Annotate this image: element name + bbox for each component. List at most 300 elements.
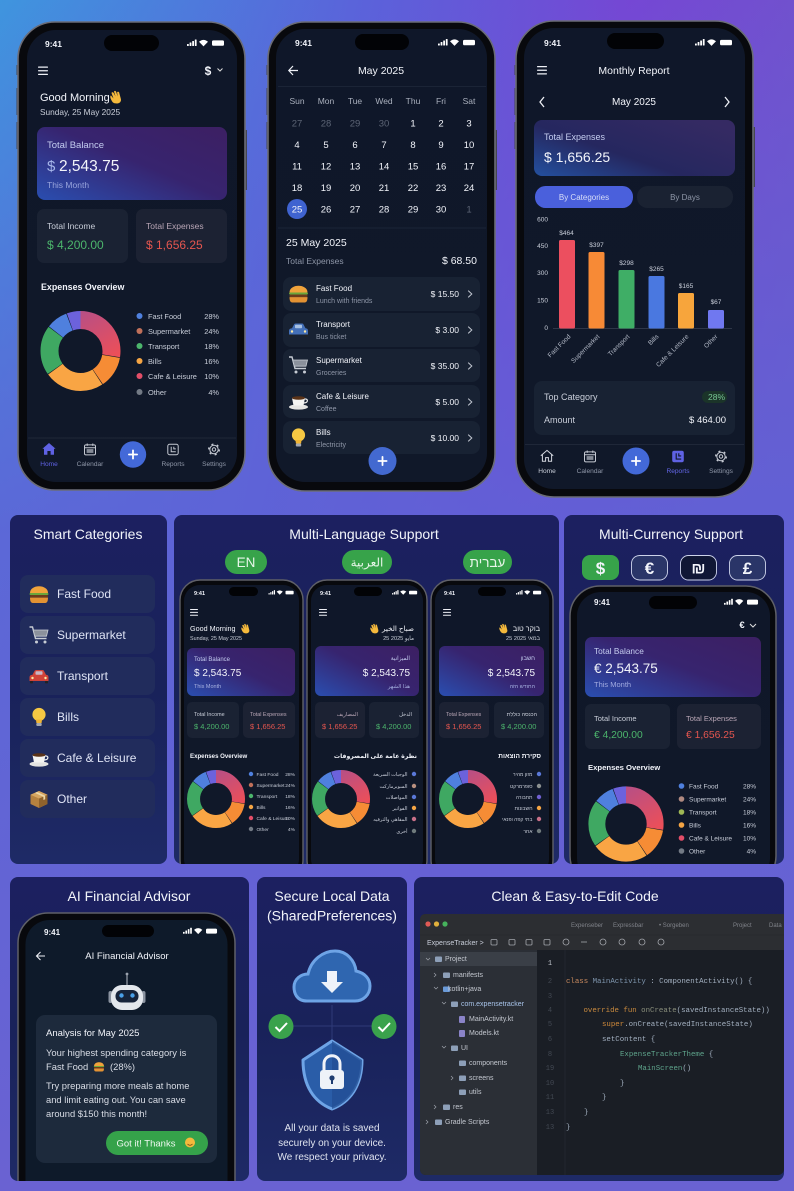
card: top category: Top Category: [544, 392, 598, 402]
expense row: bills: [283, 421, 480, 454]
calendar grid: 21: [379, 183, 389, 194]
currency button: euro: €: [645, 559, 655, 578]
phone: euro currency view: 18%: [743, 810, 756, 816]
source code: }: [602, 1094, 606, 1102]
calendar grid: Sat: [463, 96, 476, 106]
project tree: res: [453, 1104, 463, 1111]
line numbers: 1: [548, 960, 552, 968]
heading: AI Financial Advisor: [68, 888, 191, 904]
privacy note: [277, 1123, 387, 1163]
calendar grid: 7: [381, 140, 387, 151]
phone: euro currency view: 10%: [743, 836, 756, 842]
line numbers: 2: [548, 978, 552, 986]
category labels: Bills: [647, 333, 661, 347]
privacy note: securely on your device.: [278, 1138, 386, 1149]
card: total expenses: $ 1,656.25: [146, 238, 203, 252]
y axis labels: [537, 216, 548, 332]
mini phones: [180, 580, 553, 880]
expense row: cafe and leisure: Coffee: [316, 406, 337, 413]
calendar grid: 8: [410, 140, 416, 151]
phone: english: Fast Food: [256, 772, 279, 778]
chart legend: [136, 312, 219, 397]
phone: arabic: المواصلات: [386, 795, 408, 801]
status bar: 9:41: [295, 38, 312, 48]
expense row: transport: Bus ticket: [316, 334, 346, 341]
phone: arabic: الدخل: [399, 712, 412, 718]
category: other: [20, 780, 155, 818]
chart legend: 18%: [204, 342, 219, 351]
phone: english: Total Expenses: [250, 712, 287, 718]
calendar grid: 3: [466, 118, 472, 130]
category: transport: Transport: [57, 669, 109, 683]
card: total balance: 2,543.75: [59, 158, 119, 175]
day summary: 25 May 2025: [286, 237, 347, 249]
phone: arabic: $ 1,656.25: [322, 722, 357, 731]
window title bar: Expenseber: [571, 923, 603, 929]
expense row: fast food: Fast Food: [316, 284, 352, 293]
greeting: Sunday, 25 May 2025: [40, 107, 120, 117]
icon: check right: [372, 1014, 396, 1039]
phone: english: $ 4,200.00: [194, 722, 229, 731]
calendar grid: 4: [294, 140, 300, 151]
value labels: [559, 230, 722, 306]
chart legend: 16%: [204, 357, 219, 366]
heading: Clean & Easy-to-Edit Code: [491, 888, 659, 904]
toolbar: ExpenseTracker >: [427, 940, 484, 947]
phone: arabic: الميزانية: [391, 656, 410, 662]
project tree: Models.kt: [469, 1030, 499, 1037]
phone frame: [514, 21, 755, 497]
phone: english: Good Morning: [190, 624, 236, 633]
phone: euro currency view: Total Income: [594, 714, 637, 723]
calendar grid: 2: [438, 118, 444, 130]
phone: english: Cafe & Leisure: [256, 816, 289, 822]
phone: hebrew: חשבונות: [515, 806, 532, 812]
category labels: Cafe & Leisure: [655, 333, 691, 369]
phone: euro currency view: 24%: [743, 796, 756, 804]
calendar grid: 27: [292, 118, 302, 130]
heading: Secure Local Data: [274, 888, 390, 904]
heading: Multi-Language Support: [289, 526, 439, 542]
bottom navigation: Reports: [161, 461, 185, 468]
phone: euro currency view: Fast Food: [689, 784, 719, 790]
card: total income: [37, 209, 128, 263]
line numbers: 13: [546, 1124, 554, 1132]
source code: MainScreen(): [638, 1065, 691, 1073]
expense row: bills: Electricity: [316, 442, 346, 449]
source code: }: [566, 1124, 570, 1132]
bottom navigation: Settings: [202, 461, 227, 468]
expense row: transport: $ 3.00: [435, 325, 459, 335]
category labels: Transport: [607, 333, 632, 358]
phone: english: 9:41: [194, 591, 205, 597]
phone: monthly report screen: [514, 21, 755, 497]
heading: (SharedPreferences): [267, 908, 397, 924]
category: transport: [20, 657, 155, 695]
phone: hebrew: בתי קפה ופנאי: [502, 817, 532, 823]
project tree: components: [469, 1060, 508, 1067]
window title bar: Expressbar: [613, 923, 643, 929]
icon: menu: [38, 66, 48, 75]
phone: euro currency view: Cafe & Leisure: [689, 836, 732, 842]
chart legend: 10%: [204, 372, 219, 381]
line numbers: 3: [548, 993, 552, 1001]
source code: override fun onCreate(savedInstanceState)): [584, 1007, 770, 1015]
expense row: fast food: $ 15.50: [431, 289, 459, 299]
currency button: pound: £: [743, 559, 753, 578]
phone: english: 28%: [285, 772, 296, 778]
calendar grid: 19: [321, 183, 331, 194]
currency button: dollar: [582, 555, 619, 580]
calendar grid: [278, 86, 486, 228]
phone: euro currency view: Other: [689, 848, 706, 856]
phone: hebrew: [431, 580, 553, 880]
card: top category: $ 464.00: [689, 415, 726, 426]
tab: by days: By Days: [670, 193, 700, 202]
value labels: $464: [559, 230, 574, 237]
card: top category: [534, 381, 735, 435]
heading: [267, 888, 397, 924]
day summary: [286, 237, 477, 267]
calendar grid: 28: [379, 204, 389, 216]
line numbers: 13: [546, 1109, 554, 1117]
category labels: Supermarket: [570, 333, 602, 365]
y axis labels: 600: [537, 216, 548, 224]
phone: euro currency view: Supermarket: [689, 796, 726, 804]
phone: arabic: الوجبات السريعة: [373, 772, 408, 778]
icon: menu: [537, 66, 547, 74]
source code: class MainActivity : ComponentActivity() {: [566, 978, 752, 986]
line numbers: 19: [546, 1065, 554, 1073]
panel: secure local data: [257, 877, 407, 1181]
source code: }: [584, 1109, 588, 1117]
advice message card: and limit eating out. You can save: [46, 1094, 186, 1105]
currency selector: [205, 64, 222, 78]
phone frame: [266, 22, 497, 491]
phone frame: [16, 22, 247, 490]
project tree: screens: [469, 1075, 494, 1082]
phone: english: Other: [256, 827, 269, 833]
phone: arabic: 25 مايو 2025: [383, 636, 414, 642]
project tree: com.expensetracker: [461, 1001, 525, 1008]
phone: arabic: نظرة عامة على المصروفات: [334, 753, 417, 760]
project tree: manifests: [453, 972, 483, 979]
card: total income: $ 4,200.00: [47, 238, 104, 252]
value labels: $165: [679, 283, 694, 290]
status bar: [544, 38, 732, 48]
bars: [559, 240, 724, 328]
project tree: MainActivity.kt: [469, 1016, 513, 1023]
y axis labels: 450: [537, 243, 548, 250]
advice message card: Analysis for May 2025: [46, 1028, 139, 1039]
expense row: fast food: Lunch with friends: [316, 298, 373, 305]
category: supermarket: [20, 616, 155, 654]
calendar grid: 26: [321, 204, 331, 216]
panel: ai financial advisor: [10, 877, 249, 1191]
project tree: utils: [469, 1089, 482, 1096]
calendar grid: Tue: [348, 96, 362, 106]
phone: english: $ 1,656.25: [250, 722, 285, 731]
phone: euro currency view: Transport: [689, 810, 717, 816]
expense row: cafe and leisure: [283, 385, 480, 418]
calendar grid: 29: [408, 204, 418, 216]
calendar grid: 23: [436, 183, 446, 194]
category labels: Fast Food: [547, 333, 573, 359]
phone: english: Supermarket: [256, 783, 285, 789]
chart legend: Bills: [148, 357, 162, 366]
category: cafe and leisure: Cafe & Leisure: [57, 751, 137, 765]
line numbers: 10: [546, 1080, 554, 1088]
bottom navigation: Reports: [666, 468, 690, 475]
icon: cloud download: [294, 951, 370, 1001]
bottom navigation: [525, 444, 744, 475]
card: total expenses: $ 1,656.25: [544, 149, 610, 165]
currency button: dollar: $: [596, 559, 606, 578]
value labels: $265: [649, 266, 664, 273]
heading: Smart Categories: [34, 526, 142, 542]
category: fast food: [20, 575, 155, 613]
project tree: [420, 952, 537, 1126]
add button: [368, 447, 396, 475]
phone: euro currency view: [570, 586, 776, 886]
bottom navigation: [28, 438, 236, 468]
phone: arabic: صباح الخير: [381, 624, 414, 633]
expense row: supermarket: [283, 349, 480, 382]
card: total expenses: [136, 209, 227, 263]
phone: euro currency view: 28%: [743, 784, 756, 790]
language pill: arabic: [342, 550, 392, 574]
chart legend: 28%: [204, 312, 219, 321]
phone: hebrew: אחר: [523, 829, 533, 835]
project tree: UI: [461, 1045, 468, 1052]
phone: hebrew: $ 2,543.75: [488, 668, 535, 679]
expense row: fast food: [283, 277, 480, 311]
icon: check left: [268, 1014, 294, 1039]
screen title: Monthly Report: [598, 65, 670, 77]
language pill: english: EN: [237, 555, 255, 570]
line numbers: 8: [548, 1051, 552, 1059]
phone: advisor chat: 9:41: [44, 928, 61, 937]
currency selector: $: [205, 64, 212, 78]
phone: hebrew: סופרמרקט: [510, 784, 532, 790]
phone: euro currency view: € 1,656.25: [686, 730, 735, 741]
bottom navigation: Home: [40, 461, 58, 468]
window title bar: Data: [769, 923, 782, 929]
phone: english: 24%: [285, 783, 296, 789]
source code: setContent {: [602, 1036, 655, 1044]
category: cafe and leisure: [20, 739, 155, 777]
phone: english: Total Income: [194, 712, 225, 718]
panel: multi-language support: [174, 515, 559, 880]
advice message card: Try preparing more meals at home: [46, 1080, 189, 1091]
calendar grid: 27: [350, 204, 360, 216]
chart legend: Transport: [148, 342, 179, 351]
heading: expenses overview: Expenses Overview: [41, 282, 124, 292]
line numbers: 11: [546, 1094, 554, 1102]
phone: arabic: هذا الشهر: [387, 684, 410, 690]
calendar grid: 15: [408, 162, 418, 172]
card: total balance: This Month: [47, 180, 89, 190]
card: total balance: [37, 127, 227, 200]
day summary: $ 68.50: [442, 255, 477, 267]
phone: euro currency view: 16%: [743, 822, 756, 830]
expense row: transport: Transport: [316, 320, 351, 329]
phone: euro currency view: Total Balance: [594, 646, 644, 656]
calendar grid: 11: [292, 162, 302, 172]
status bar: [45, 39, 224, 49]
phone: arabic: السوبرماركت: [379, 784, 408, 790]
greeting: [40, 91, 121, 117]
chart legend: Cafe & Leisure: [148, 372, 197, 381]
phone: arabic: $ 2,543.75: [363, 668, 410, 679]
category: supermarket: Supermarket: [57, 628, 126, 642]
phone: english: Transport: [256, 794, 278, 800]
phone: euro currency view: € 4,200.00: [594, 730, 643, 741]
project tree: Gradle Scripts: [445, 1119, 490, 1126]
bar chart: [537, 216, 732, 369]
window title bar: [420, 921, 784, 935]
chart legend: Fast Food: [148, 312, 181, 321]
panel: smart categories: [10, 515, 167, 864]
calendar grid: 6: [352, 140, 358, 151]
phone: euro currency view: Total Expenses: [686, 714, 737, 723]
expense row: supermarket: Supermarket: [316, 356, 363, 365]
currency button: shekel: [680, 556, 716, 580]
phone: english: [180, 580, 303, 880]
calendar grid: 30: [436, 204, 446, 216]
calendar grid: 12: [321, 162, 331, 172]
phone: hebrew: הכנסה כוללת: [507, 711, 537, 718]
calendar grid: 28: [321, 118, 331, 130]
y axis labels: 150: [537, 298, 548, 304]
phone: english: This Month: [194, 684, 221, 690]
chart legend: Other: [148, 388, 167, 397]
phone: english: Total Balance: [194, 657, 231, 663]
phone: english: 16%: [285, 805, 296, 811]
expense row: transport: [283, 313, 480, 347]
phone: english: $ 2,543.75: [194, 668, 242, 679]
phone: arabic: 9:41: [320, 591, 331, 597]
donut chart: [50, 320, 112, 382]
bottom navigation: Calendar: [577, 468, 604, 475]
month title: May 2025: [358, 65, 404, 77]
calendar grid: Fri: [436, 96, 446, 106]
calendar grid: 1: [410, 118, 416, 130]
card: total expenses: Total Expenses: [544, 132, 606, 142]
phone: euro currency view: Bills: [689, 822, 702, 830]
expense row: supermarket: Groceries: [316, 370, 347, 377]
source code: [566, 978, 770, 1132]
month switcher: [540, 97, 729, 108]
card: total balance: $: [47, 158, 56, 175]
bottom navigation: Settings: [709, 468, 734, 475]
y axis labels: 300: [537, 270, 548, 277]
calendar grid: 25: [292, 204, 302, 216]
language pill: arabic: العربية: [351, 556, 383, 570]
connector lines: [293, 1005, 372, 1040]
calendar grid: 14: [379, 162, 389, 172]
phone: euro currency view: 4%: [747, 848, 756, 856]
icon: back arrow: [289, 66, 298, 75]
phone: arabic: المقاهي والترفيه: [373, 817, 408, 823]
calendar grid: 30: [379, 118, 389, 130]
expense row: bills: $ 10.00: [431, 433, 459, 443]
phone: arabic: $ 4,200.00: [376, 722, 411, 731]
language pill: hebrew: עברית: [470, 555, 505, 570]
phone: advisor chat: AI Financial Advisor: [85, 951, 169, 962]
phone: hebrew: 9:41: [444, 591, 455, 597]
advice message card: Your highest spending category is: [46, 1047, 187, 1058]
button: got it: [106, 1131, 208, 1155]
line numbers: 4: [548, 1007, 552, 1015]
phone: hebrew: חשבון: [520, 656, 535, 662]
calendar grid: 17: [464, 162, 474, 172]
phone: english: 18%: [285, 794, 296, 800]
project tree: kotlin+java: [448, 986, 481, 993]
phone: arabic: أخرى: [396, 828, 408, 835]
category: other: Other: [57, 792, 87, 806]
value labels: $397: [589, 242, 604, 249]
bottom navigation: Calendar: [77, 461, 104, 468]
phone: hebrew: מזון מהיר: [513, 772, 533, 778]
line numbers: 5: [548, 1021, 552, 1029]
phone: hebrew: תחבורה: [516, 795, 533, 801]
ide window: [420, 914, 784, 1175]
calendar grid: Mon: [318, 96, 335, 106]
card: total income: Total Income: [47, 221, 95, 231]
toolbar: [427, 939, 664, 947]
phone: english: Sunday, 25 May 2025: [190, 636, 242, 642]
phone: calendar screen: [266, 22, 497, 491]
advice message card: [36, 1015, 217, 1163]
category labels: Other: [703, 333, 720, 350]
phone: advisor chat: [18, 913, 235, 1191]
expense row: cafe and leisure: $ 5.00: [435, 397, 459, 407]
button: got it: Got it! Thanks: [116, 1138, 176, 1150]
panel: clean code: [414, 877, 784, 1181]
card: total balance: Total Balance: [47, 140, 104, 151]
phone: hebrew: 25 במאי 2025: [506, 636, 541, 642]
calendar grid: 29: [350, 118, 360, 130]
phone: english: 10%: [285, 816, 296, 822]
line numbers: 6: [548, 1036, 552, 1044]
category: fast food: Fast Food: [57, 587, 111, 601]
calendar grid: 22: [408, 183, 418, 194]
calendar grid: 9: [438, 140, 444, 151]
calendar grid: Wed: [375, 96, 393, 106]
phone: hebrew: $ 4,200.00: [501, 722, 536, 731]
y axis labels: 0: [544, 325, 548, 332]
line numbers: [546, 960, 554, 1132]
phone: arabic: [307, 580, 427, 880]
tab: by days: [637, 186, 733, 208]
calendar grid: 18: [292, 183, 302, 194]
card: total expenses: Total Expenses: [146, 221, 204, 231]
project tree: Project: [445, 956, 467, 963]
phone: home screen: [16, 22, 247, 490]
heading: Multi-Currency Support: [599, 526, 743, 542]
calendar grid: 16: [436, 162, 446, 172]
card: top category: Amount: [544, 415, 576, 425]
calendar grid: 1: [466, 204, 472, 216]
calendar grid: Thu: [406, 96, 421, 106]
value labels: $298: [619, 260, 634, 267]
day summary: Total Expenses: [286, 256, 344, 266]
source code: super.onCreate(savedInstanceState): [602, 1021, 753, 1029]
value labels: $67: [711, 299, 722, 306]
panel: multi-currency support: [564, 515, 784, 886]
phone: arabic: الفواتير: [391, 806, 408, 812]
